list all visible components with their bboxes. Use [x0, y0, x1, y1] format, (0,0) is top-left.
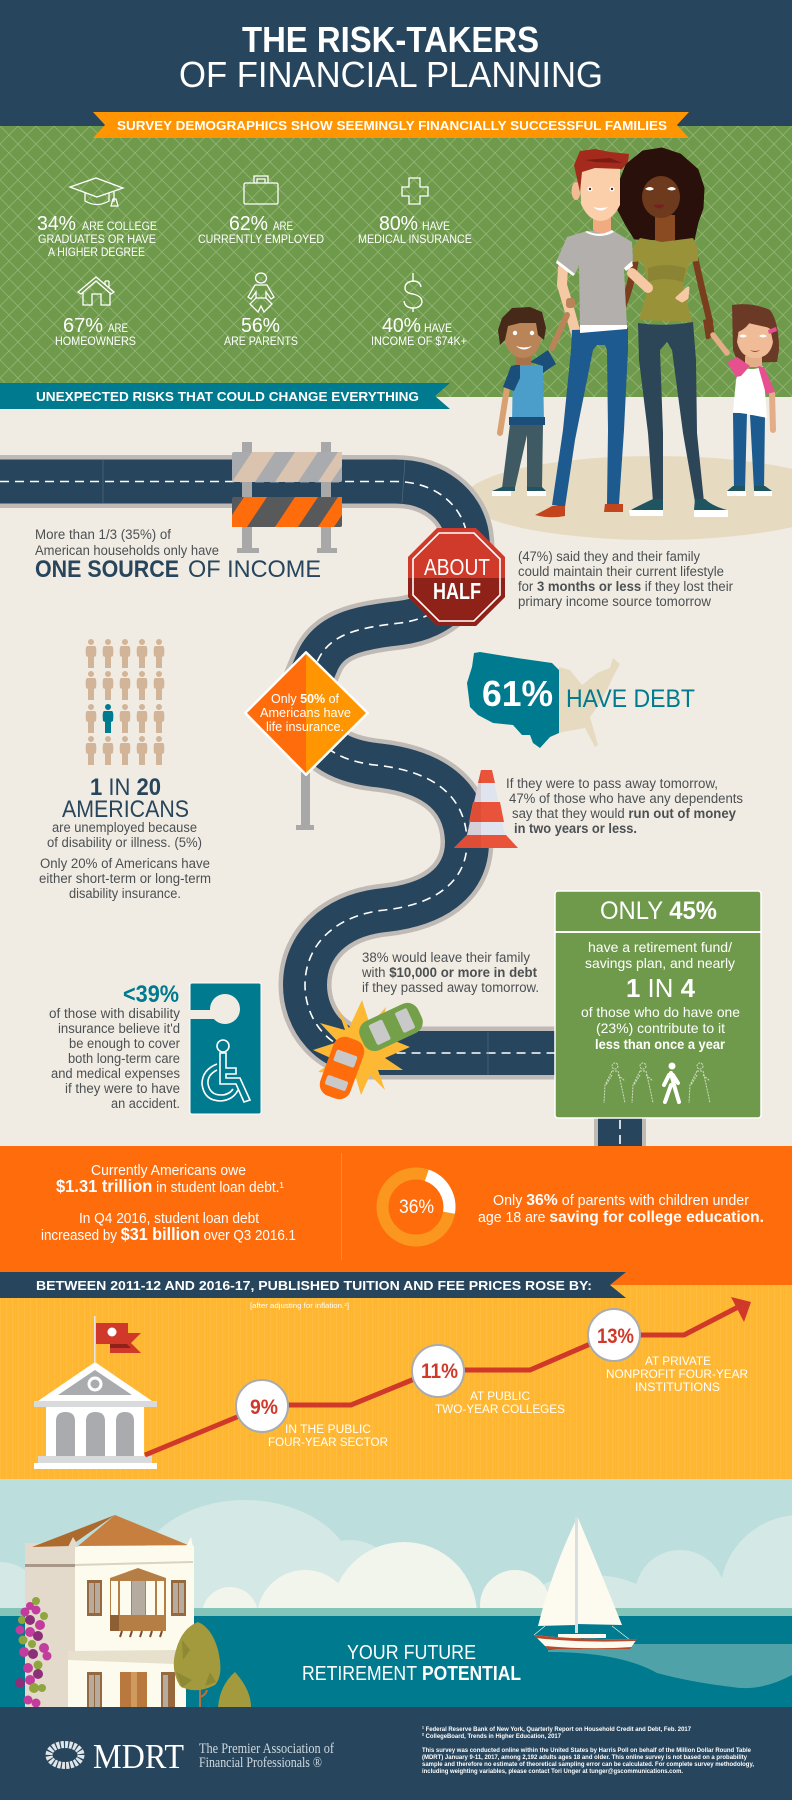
text: under 39%: if they were to have	[65, 1081, 180, 1096]
stat: insurance: 80%	[379, 213, 418, 235]
stat: parents: 56%	[241, 315, 280, 337]
panel: only 45% retirement sign: (23%) contribute to it	[596, 1020, 725, 1036]
icon: road barricade	[232, 442, 342, 553]
text: your future retirement potential: RETIREMENT	[302, 1663, 417, 1685]
sea	[0, 1608, 792, 1616]
logo: MDRT: The Premier Association of	[199, 1741, 334, 1757]
title	[179, 19, 603, 95]
illustration: trees	[174, 1622, 251, 1707]
ribbon: survey demographics	[93, 112, 689, 138]
text: your future retirement potential	[302, 1642, 521, 1685]
panel: footer	[0, 1707, 792, 1800]
text: 38% debt: 38% would leave their family	[362, 950, 530, 965]
icon: sailboat	[534, 1517, 637, 1649]
boat wake	[548, 1644, 792, 1688]
footnotes: ² CollegeBoard, Trends in Higher Education, 2017	[422, 1733, 561, 1740]
text: your future retirement potential: POTENTIAL	[422, 1663, 521, 1685]
panel: retirement seascape	[0, 1479, 792, 1708]
icon: four walkers	[604, 1062, 710, 1103]
road stub to bottom	[594, 1118, 646, 1146]
text: 47% lifestyle: primary income source tomorrow	[518, 594, 711, 609]
clouds	[0, 1500, 792, 1688]
logo: MDRT: Financial Professionals ®	[199, 1755, 322, 1771]
ribbon: tuition heading: BETWEEN 2011-12 AND 2016-17, PUBLISHED TUITION AND FEE PRICES ROSE BY:	[36, 1278, 592, 1293]
stat: homeowners: 67%	[63, 315, 103, 337]
footnotes: (MDRT) January 9-11, 2017, among 2,192 adults ages 18 and older. This online survey is not based on a probability	[422, 1754, 747, 1761]
icon: car crash	[313, 999, 427, 1103]
text: 1 in 20 Americans: Only 20% of Americans have	[40, 856, 210, 871]
stat: income: 40%	[382, 315, 421, 337]
illustration: bougainvillea	[15, 1597, 52, 1708]
stat: insurance: HAVE	[422, 219, 450, 233]
text: your future retirement potential: YOUR FUTURE	[347, 1642, 476, 1664]
ribbon: survey demographics: SURVEY DEMOGRAPHICS SHOW SEEMINGLY FINANCIALLY SUCCESSFUL FAMILIES	[117, 118, 667, 133]
stat: parents: ARE PARENTS	[224, 334, 298, 348]
text: 1 in 20 Americans: either short-term or long-term	[39, 871, 211, 886]
text: 47% lifestyle: (47%) said they and their family	[518, 549, 700, 564]
map: 61% have debt	[467, 652, 695, 748]
stat: college: A HIGHER DEGREE	[48, 245, 145, 259]
text: under 39%: <39%	[123, 981, 179, 1008]
text: 36% of parents	[478, 1192, 764, 1226]
panel: only 45% retirement sign: less than once a year	[595, 1036, 725, 1052]
footnotes: including weighting variables, please contact Tori Unger at tunger@gscommunications.com.	[422, 1768, 683, 1775]
text: one source of income: ONE SOURCE	[35, 556, 179, 583]
stat: homeowners: HOMEOWNERS	[55, 334, 136, 348]
label: public four-year: IN THE PUBLIC	[285, 1422, 371, 1436]
map: 61% have debt: 61%	[482, 673, 553, 714]
panel: only 45% retirement sign: 1 IN 4	[626, 973, 696, 1003]
girl	[713, 304, 779, 496]
illustration: family	[492, 149, 779, 517]
label: public two-year: TWO-YEAR COLLEGES	[435, 1402, 565, 1416]
woman	[618, 149, 728, 517]
stat: college	[37, 213, 157, 259]
marker: 11%	[412, 1345, 464, 1397]
ground under family	[465, 456, 792, 540]
label: private nonprofit: AT PRIVATE	[645, 1354, 711, 1368]
stat: employed: ARE	[273, 219, 293, 233]
title: THE RISK-TAKERS	[242, 19, 539, 60]
stat: parents	[224, 315, 298, 348]
icon: diamond road sign	[245, 652, 368, 830]
text: student loan debt: increased by $31 billion over Q3 2016.1	[41, 1224, 296, 1244]
ribbon: unexpected risks	[0, 383, 450, 409]
ribbon: tuition heading	[0, 1272, 626, 1298]
text: student loan debt: In Q4 2016, student loan debt	[79, 1211, 259, 1227]
text: under 39%: both long-term care	[68, 1051, 180, 1066]
icon: stop sign about half: ABOUT	[424, 554, 490, 580]
text: 36% of parents: Only 36% of parents with children under	[493, 1192, 749, 1209]
icon: stop sign about half: HALF	[433, 578, 481, 604]
text: student loan debt: Currently Americans owe	[91, 1163, 246, 1179]
label: private nonprofit	[606, 1354, 748, 1394]
stat: college: 34%	[37, 213, 76, 235]
label: private nonprofit: INSTITUTIONS	[635, 1380, 720, 1394]
boy	[492, 298, 575, 496]
icon: diamond road sign: Americans have	[260, 705, 351, 720]
stat: employed: CURRENTLY EMPLOYED	[198, 232, 324, 246]
text: run out of money: in two years or less.	[514, 821, 637, 836]
label: public four-year	[268, 1422, 388, 1449]
footnotes: This survey was conducted online within the United States by Harris Poll on behalf of the Million Dollar Round Table	[422, 1747, 751, 1754]
text: run out of money	[506, 776, 743, 836]
chart: rising price line	[145, 1297, 751, 1455]
stat: employed	[198, 213, 324, 246]
title: OF FINANCIAL PLANNING	[179, 54, 603, 95]
icon: diamond road sign: life insurance.	[266, 719, 344, 734]
panel: only 45% retirement sign: have a retirement fund/	[588, 939, 732, 955]
footnotes	[422, 1726, 754, 1775]
text: one source of income: More than 1/3 (35%) of	[35, 527, 171, 542]
stat: insurance: MEDICAL INSURANCE	[358, 232, 472, 246]
text: student loan debt	[41, 1163, 296, 1244]
text: run out of money: If they were to pass away tomorrow,	[506, 776, 718, 791]
chart: 36% donut: 36%	[399, 1197, 434, 1218]
text: 36% of parents: age 18 are saving for college education.	[478, 1209, 764, 1226]
stat: income: HAVE	[424, 321, 452, 335]
icon: dollar sign	[404, 273, 422, 312]
text: under 39%: and medical expenses	[51, 1066, 180, 1081]
text: under 39%	[49, 981, 180, 1111]
footnotes: sample and therefore no estimate of theoretical sampling error can be calculated. For complete survey methodology,	[422, 1761, 754, 1768]
logo: MDRT	[49, 1737, 334, 1776]
icon: house	[78, 277, 114, 305]
winding road	[0, 460, 556, 1075]
text: one source of income: OF INCOME	[188, 556, 321, 583]
stat: college: GRADUATES OR HAVE	[38, 232, 156, 246]
marker: 11%: 11%	[421, 1360, 458, 1383]
icon: graduation cap	[70, 178, 123, 206]
map: 61% have debt: HAVE DEBT	[566, 685, 695, 713]
text: under 39%: insurance believe it'd	[58, 1021, 180, 1036]
stat: homeowners	[55, 315, 136, 348]
text: 1 in 20 Americans: of disability or illness. (5%)	[47, 835, 202, 850]
text: 1 in 20 Americans: AMERICANS	[62, 796, 189, 823]
text: 38% debt: if they passed away tomorrow.	[362, 980, 539, 995]
text: 38% debt: with $10,000 or more in debt	[361, 965, 537, 980]
text: 1 in 20 Americans: disability insurance.	[69, 886, 181, 901]
panel: tuition	[0, 1272, 792, 1479]
panel: only 45% retirement sign: of those who do have one	[581, 1004, 740, 1020]
label: public two-year	[435, 1389, 565, 1416]
stat: income: INCOME OF $74K+	[371, 334, 467, 348]
text: run out of money: 47% of those who have any dependents	[509, 791, 743, 806]
label: public four-year: FOUR-YEAR SECTOR	[268, 1435, 388, 1449]
icon: stop sign about half	[408, 528, 505, 626]
stat: insurance	[358, 213, 472, 246]
marker: 9%: 9%	[250, 1396, 278, 1419]
illustration: white villa	[25, 1515, 194, 1707]
icon: diamond road sign: Only 50% of	[271, 691, 339, 706]
panel: demographics	[0, 112, 792, 397]
icon: briefcase	[244, 176, 278, 204]
text: under 39%: be enough to cover	[69, 1036, 180, 1051]
text: 1 in 20 Americans: 1 IN 20	[90, 774, 161, 801]
footnotes: ¹ Federal Reserve Bank of New York, Quarterly Report on Household Credit and Debt, Feb. 2017	[422, 1726, 691, 1733]
icon: college building	[34, 1316, 157, 1469]
text: 1 in 20 Americans: are unemployed because	[52, 820, 197, 835]
text: run out of money: say that they would run out of money	[512, 806, 736, 821]
text: student loan debt: $1.31 trillion in student loan debt.¹	[56, 1176, 284, 1196]
text: 38% debt	[361, 950, 539, 995]
text: 47% lifestyle: could maintain their current lifestyle	[518, 564, 724, 579]
text: one source of income	[35, 527, 321, 583]
header panel	[0, 0, 792, 126]
note: inflation: [after adjusting for inflation.²]	[250, 1303, 349, 1310]
panel: student debt	[0, 1146, 792, 1291]
text: 47% lifestyle: for 3 months or less if they lost their	[518, 579, 733, 594]
label: private nonprofit: NONPROFIT FOUR-YEAR	[606, 1367, 748, 1381]
text: under 39%: an accident.	[111, 1096, 180, 1111]
text: 47% lifestyle	[518, 549, 733, 609]
stat: college: ARE COLLEGE	[82, 219, 157, 233]
text: under 39%: of those with disability	[49, 1006, 180, 1021]
chart: 36% donut	[382, 1174, 450, 1240]
label: public two-year: AT PUBLIC	[470, 1389, 530, 1403]
icon: traffic cone	[454, 770, 518, 848]
panel: only 45% retirement sign	[555, 891, 761, 1118]
man	[535, 149, 688, 517]
marker: 13%: 13%	[597, 1325, 634, 1348]
text: 1 in 20 Americans	[39, 774, 211, 901]
ribbon: unexpected risks: UNEXPECTED RISKS THAT COULD CHANGE EVERYTHING	[36, 389, 419, 404]
marker: 9%	[236, 1380, 288, 1432]
text: one source of income: American households only have	[35, 543, 219, 558]
logo: MDRT: MDRT	[93, 1737, 184, 1776]
panel: only 45% retirement sign: ONLY 45%	[600, 897, 717, 925]
icon: baby	[248, 273, 274, 312]
icon: door hanger wheelchair	[189, 983, 261, 1114]
pictogram: 1 in 20 people	[86, 639, 164, 765]
stat: income	[371, 315, 467, 348]
stat: homeowners: ARE	[108, 321, 128, 335]
panel: only 45% retirement sign: savings plan, and nearly	[585, 955, 735, 971]
icon: medical cross	[402, 178, 428, 204]
stat: employed: 62%	[229, 213, 268, 235]
marker: 13%	[588, 1309, 640, 1361]
